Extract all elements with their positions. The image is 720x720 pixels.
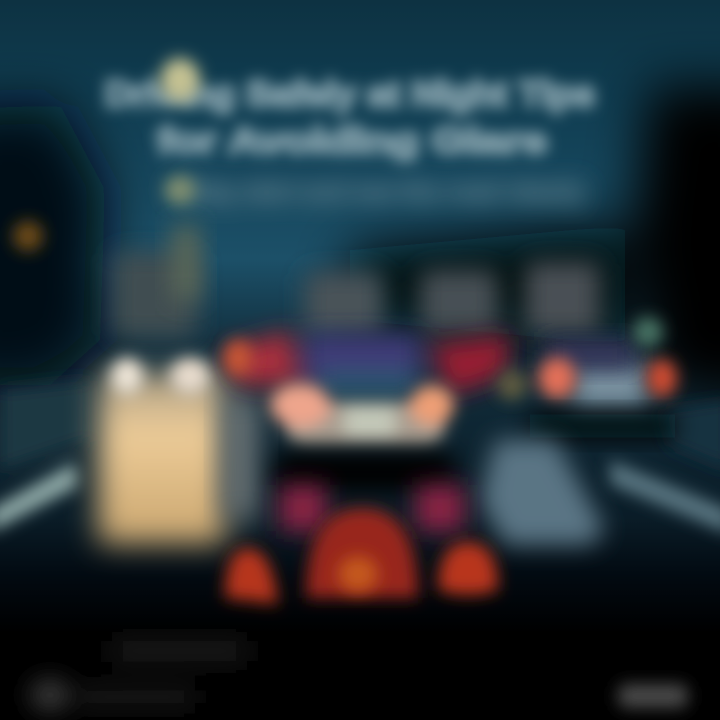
central car (224, 330, 510, 492)
distant vehicles in haze (112, 252, 600, 337)
title (105, 73, 595, 161)
icon: title light (160, 58, 200, 102)
amber roadside light (13, 221, 43, 251)
icon: right warning (438, 542, 498, 595)
icon: left warning (225, 548, 278, 604)
icon: central warning (306, 508, 418, 598)
road glare patch (480, 440, 605, 545)
street lamp pole (172, 225, 200, 300)
glow panel on left: headlight beam (98, 358, 258, 544)
footer text blocks (30, 640, 247, 711)
road markings (0, 380, 720, 534)
icon: subtitle bullet (164, 175, 196, 205)
title: Driving Safely at Night Tips (105, 73, 595, 114)
car on right (497, 317, 677, 438)
footer badge (618, 684, 688, 708)
title: for Avoiding Glare (157, 120, 547, 161)
dark tree silhouettes (0, 85, 720, 400)
subtitle: Stay alert and see the road clearly (185, 176, 585, 206)
green signal (633, 317, 663, 347)
warning icons row (225, 485, 498, 604)
